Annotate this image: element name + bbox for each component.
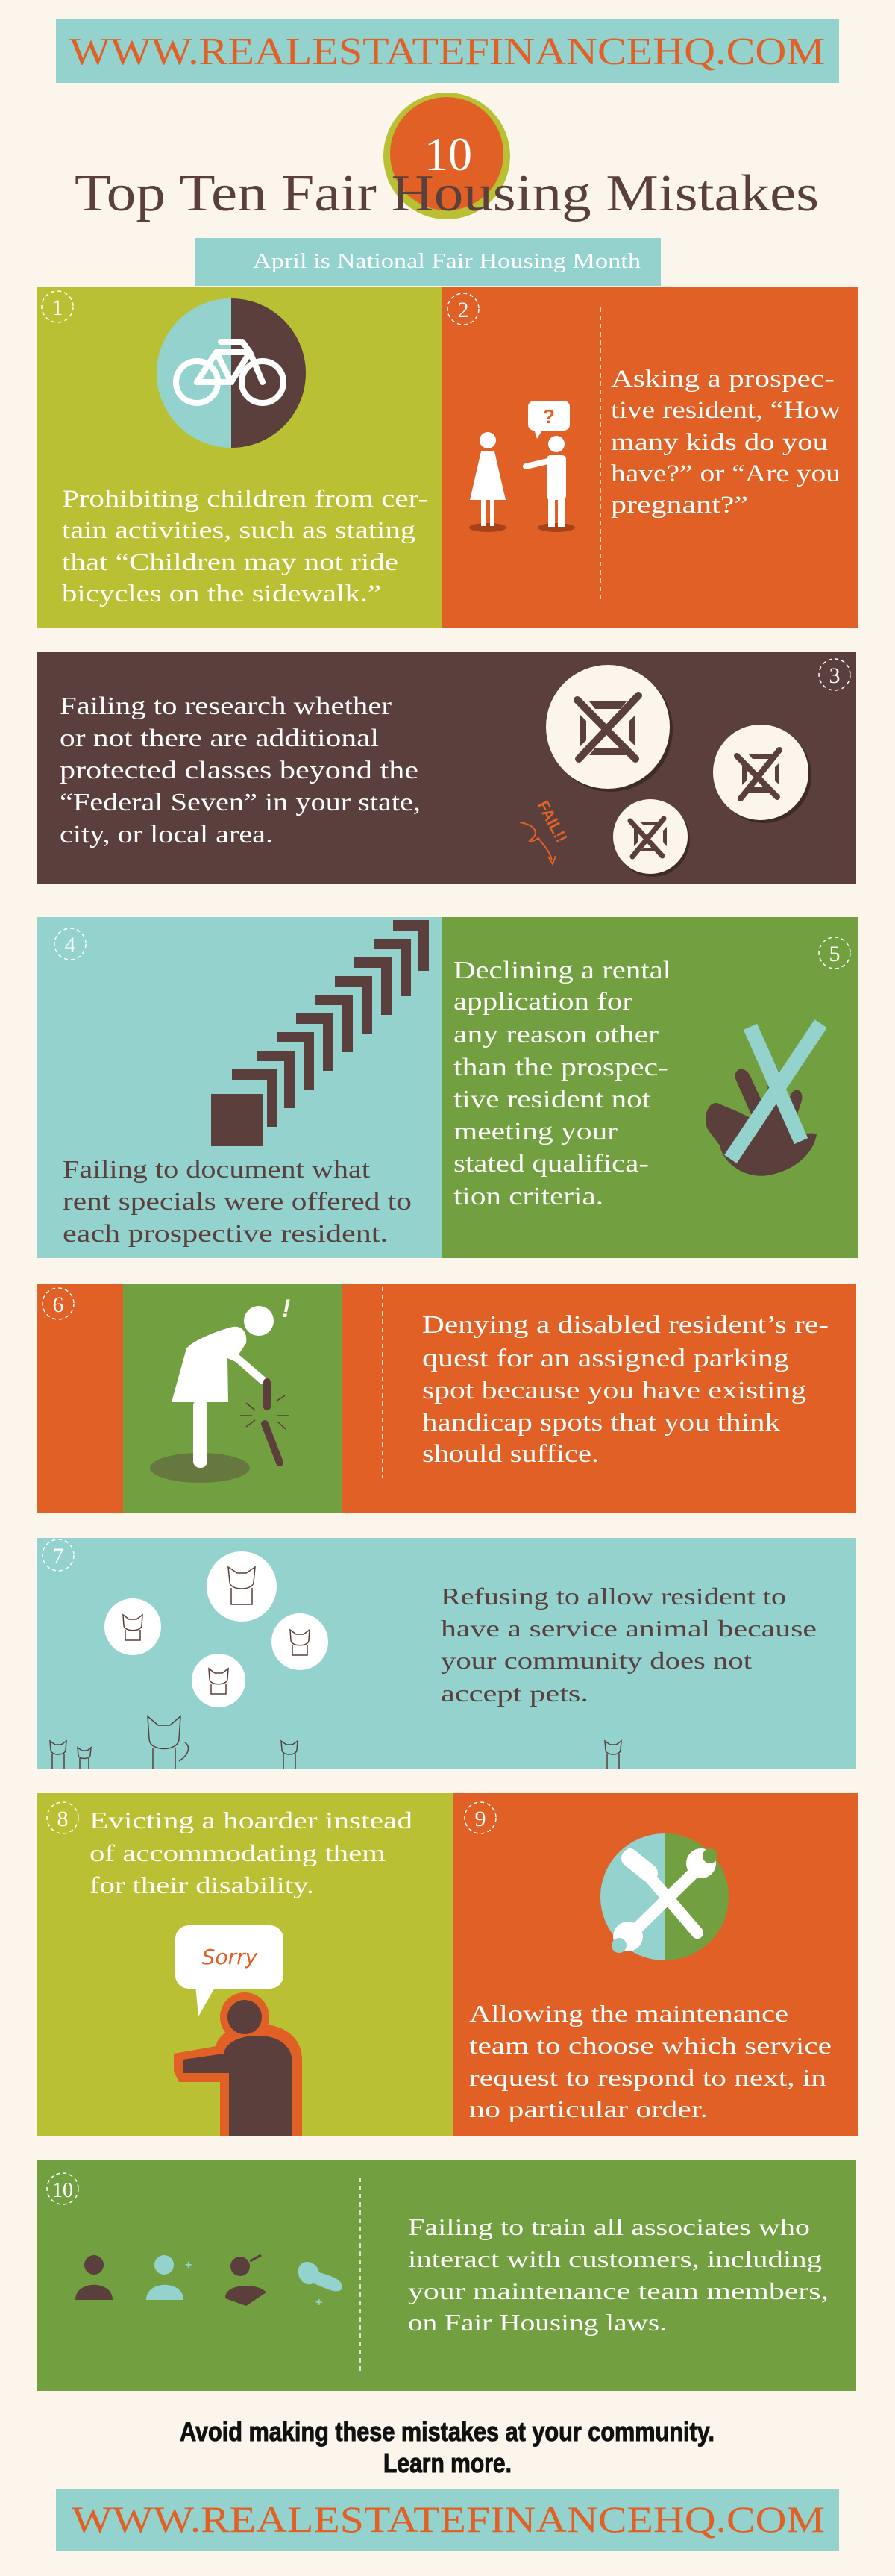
panel 6: parking spot <box>37 1284 856 1513</box>
text 5: than the prospec- <box>453 1054 668 1081</box>
icon: crossed boxes <box>520 665 811 877</box>
number 8: 8 <box>57 1807 69 1831</box>
icon: woman and man with question <box>469 401 575 532</box>
FAIL!! note <box>520 798 571 864</box>
panel 3: local protected classes <box>37 652 856 884</box>
text 6 <box>422 1311 829 1468</box>
number 7 <box>43 1539 74 1571</box>
number 1: 1 <box>52 296 63 320</box>
number 2 <box>448 293 479 325</box>
text 4 <box>63 1156 412 1248</box>
text 4: Failing to document what <box>63 1156 371 1184</box>
text 3: city, or local area. <box>60 821 273 848</box>
text 8: of accommodating them <box>90 1839 386 1866</box>
number 3 <box>819 659 850 690</box>
number 5: 5 <box>829 942 840 966</box>
footer call to action: Avoid making these mistakes at your community. <box>180 2416 715 2447</box>
text 2: Asking a prospec- <box>611 366 835 393</box>
icon: sorry person: Sorry <box>202 1945 258 1969</box>
text 7 <box>441 1583 817 1707</box>
text 5: stated qualifica- <box>453 1150 649 1178</box>
text 5: Declining a rental <box>453 957 671 984</box>
number 2: 2 <box>458 298 468 322</box>
icon: bicycle <box>157 298 306 448</box>
number 4: 4 <box>64 933 76 957</box>
icon: woman and man with question: ? <box>543 405 555 428</box>
text 3: protected classes beyond the <box>60 757 418 784</box>
number 9 <box>465 1802 496 1833</box>
text 7: Refusing to allow resident to <box>441 1583 786 1610</box>
footer call to action <box>180 2416 715 2478</box>
title: Top Ten Fair Housing Mistakes <box>75 165 819 222</box>
text 8: for their disability. <box>90 1872 314 1898</box>
bottom banner <box>56 2489 839 2551</box>
text 10: interact with customers, including <box>408 2245 822 2272</box>
text 3 <box>60 693 421 848</box>
text 1 <box>62 486 428 607</box>
icon: people: + <box>185 2259 192 2272</box>
panel 9: maintenance order <box>453 1793 858 2136</box>
text 2 <box>611 366 841 519</box>
panel 5: declining application <box>442 917 858 1258</box>
text 10 <box>408 2213 829 2336</box>
text 5: any reason other <box>453 1021 659 1048</box>
text 2: have?” or “Are you <box>611 460 841 487</box>
panel 10: training <box>37 2160 856 2391</box>
panel 8: hoarder <box>37 1793 453 2136</box>
panel 2: question <box>442 287 858 628</box>
text 1: Prohibiting children from cer- <box>62 486 428 513</box>
subtitle banner: April is National Fair Housing Month <box>253 250 641 273</box>
text 6: should suffice. <box>422 1440 599 1468</box>
number 10: 10 <box>52 2179 73 2202</box>
bottom banner: WWW.REALESTATEFINANCEHQ.COM <box>72 2498 825 2540</box>
text 2: tive resident, “How <box>611 397 841 424</box>
top banner <box>56 19 839 83</box>
text 8: Evicting a hoarder instead <box>90 1807 412 1833</box>
subtitle banner <box>195 238 661 286</box>
badge: 10: 10 <box>424 128 472 181</box>
text 5 <box>453 957 671 1210</box>
text 5: application for <box>453 988 633 1016</box>
text 8 <box>90 1807 412 1898</box>
text 9: Allowing the maintenance <box>469 2000 788 2027</box>
number 4 <box>54 928 86 960</box>
footer call to action: Learn more. <box>383 2448 512 2478</box>
text 2: pregnant?” <box>611 492 748 519</box>
text 10: Failing to train all associates who <box>408 2213 810 2240</box>
number 10 <box>47 2173 78 2204</box>
text 6: quest for an assigned parking <box>422 1345 789 1372</box>
text 7: your community does not <box>441 1647 752 1674</box>
text 2: many kids do you <box>611 429 828 456</box>
text 5: tion criteria. <box>453 1183 603 1210</box>
icon: woman with broken cane <box>150 1295 290 1483</box>
panel 4: rent specials <box>37 917 442 1258</box>
icon: people <box>75 2255 342 2309</box>
FAIL!! note: FAIL!! <box>534 798 571 845</box>
text 9 <box>469 2000 832 2122</box>
icon: hand with X <box>706 1030 817 1176</box>
text 5: meeting your <box>453 1118 618 1145</box>
icon: people: + <box>315 2296 322 2309</box>
number 6 <box>43 1288 74 1319</box>
icon: woman with broken cane: ! <box>282 1295 290 1323</box>
text 10: on Fair Housing laws. <box>408 2309 667 2336</box>
text 5: tive resident not <box>453 1086 651 1113</box>
text 4: rent specials were offered to <box>63 1188 412 1216</box>
text 6: Denying a disabled resident’s re- <box>422 1311 829 1339</box>
text 9: team to choose which service <box>469 2032 832 2059</box>
number 8 <box>47 1802 78 1833</box>
panel 7: service animal <box>37 1538 856 1769</box>
number 9: 9 <box>474 1807 486 1831</box>
text 6: handicap spots that you think <box>422 1409 780 1437</box>
icon: sorry person <box>174 1925 302 2136</box>
panel 1: bicycles <box>37 287 442 628</box>
text 3: “Federal Seven” in your state, <box>60 789 421 816</box>
number 5 <box>819 937 850 969</box>
number 1 <box>42 291 73 322</box>
text 1: bicycles on the sidewalk.” <box>62 581 381 607</box>
icon: cats in bubbles <box>50 1551 621 1769</box>
text 6: spot because you have existing <box>422 1377 806 1404</box>
number 3: 3 <box>829 663 840 688</box>
badge: 10 <box>383 93 510 219</box>
text 7: accept pets. <box>441 1680 588 1707</box>
top banner: WWW.REALESTATEFINANCEHQ.COM <box>69 31 825 73</box>
text 3: or not there are additional <box>60 725 379 752</box>
number 7: 7 <box>52 1544 64 1569</box>
text 3: Failing to research whether <box>60 693 392 720</box>
icon: stairs of boxes <box>211 925 424 1146</box>
text 1: that “Children may not ride <box>62 549 398 576</box>
text 4: each prospective resident. <box>63 1220 388 1248</box>
text 7: have a service animal because <box>441 1615 817 1642</box>
text 9: no particular order. <box>469 2095 708 2122</box>
text 10: your maintenance team members, <box>408 2278 829 2304</box>
number 6: 6 <box>52 1292 64 1317</box>
text 1: tain activities, such as stating <box>62 517 415 544</box>
icon: wrench and screwdriver <box>600 1833 729 1960</box>
text 9: request to respond to next, in <box>469 2064 826 2091</box>
